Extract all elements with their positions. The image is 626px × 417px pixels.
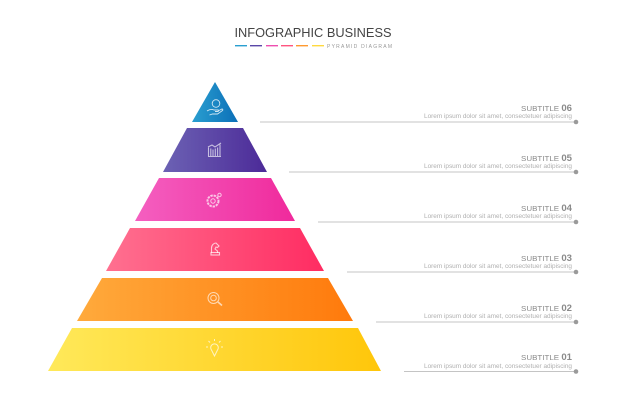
label 06: Lorem ipsum dolor sit amet, consectetuer adipiscing: [424, 113, 573, 120]
title: INFOGRAPHIC BUSINESS: [234, 26, 392, 40]
subtitle: colored dashes and pyramid diagram label: PYRAMID DIAGRAM: [327, 44, 392, 50]
label 02: Lorem ipsum dolor sit amet, consectetuer adipiscing: [424, 313, 573, 320]
label 05: SUBTITLE 05: [521, 153, 572, 163]
pyramid layer 1: yellow: [48, 328, 381, 371]
label 04: [318, 203, 578, 224]
label 04: Lorem ipsum dolor sit amet, consectetuer adipiscing: [424, 213, 573, 220]
icon: light bulb: [206, 339, 223, 356]
icon: chess knight: [211, 243, 220, 255]
label 03: Lorem ipsum dolor sit amet, consectetuer adipiscing: [424, 263, 573, 270]
icon: hand holding coin: [207, 100, 223, 115]
pyramid layer 6: blue: [192, 82, 238, 122]
label 03: SUBTITLE 03: [521, 253, 572, 263]
icon: bar chart: [208, 143, 221, 156]
label 05: Lorem ipsum dolor sit amet, consectetuer adipiscing: [424, 163, 573, 170]
pyramid layer 3: red pink: [106, 228, 324, 271]
label 01: [404, 352, 578, 374]
label 04: SUBTITLE 04: [521, 203, 572, 213]
label 01: SUBTITLE 01: [521, 352, 572, 362]
pyramid layer 4: magenta: [135, 178, 295, 221]
label 03: [347, 253, 578, 274]
label 06: [260, 103, 578, 124]
label 02: [376, 303, 578, 324]
icon: magnifier: [208, 292, 222, 306]
label 02: SUBTITLE 02: [521, 303, 572, 313]
pyramid layer 5: purple: [163, 128, 267, 172]
label 01: Lorem ipsum dolor sit amet, consectetuer adipiscing: [424, 363, 573, 370]
label 05: [289, 153, 578, 174]
pyramid layer 2: orange: [77, 278, 353, 321]
label 06: SUBTITLE 06: [521, 103, 572, 113]
icon: gear with target: [208, 193, 221, 206]
